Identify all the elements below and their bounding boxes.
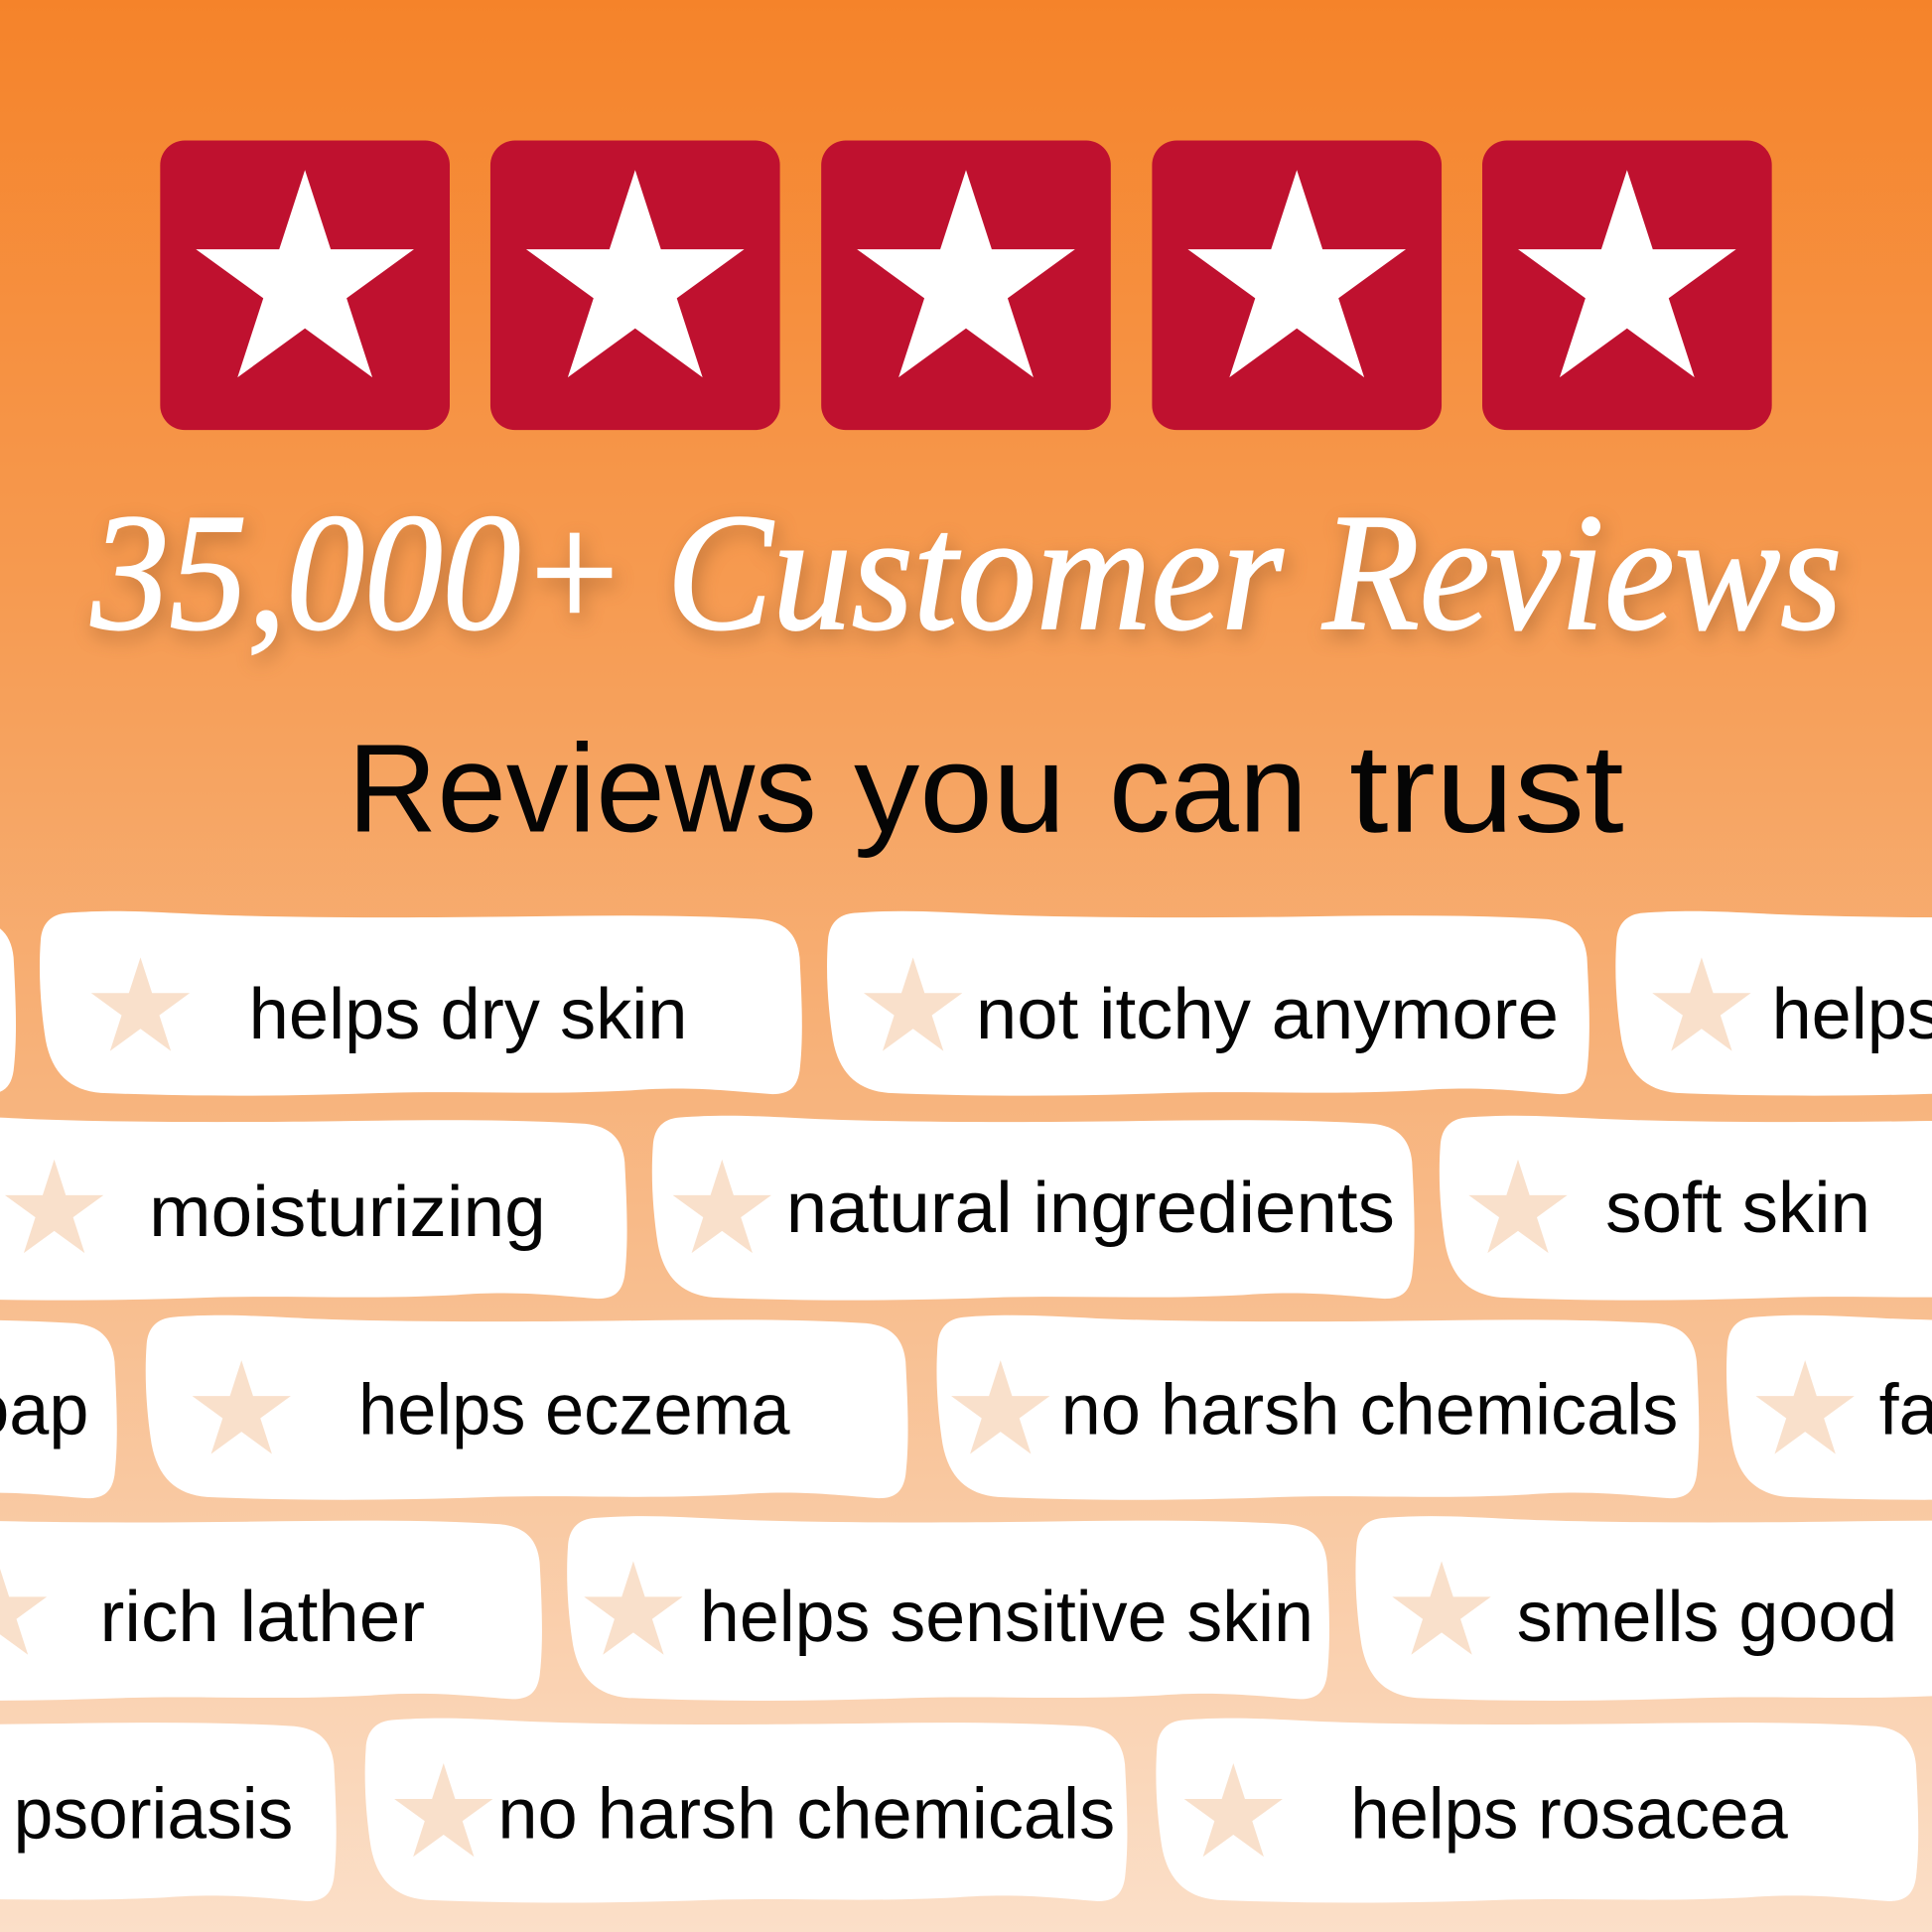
brick: helps rosacea: helps rosacea xyxy=(1350,1775,1789,1855)
brick: soap (cropped) xyxy=(0,1315,117,1500)
subtitle: reviews you can trust xyxy=(347,718,1624,859)
brick: soft skin xyxy=(1440,1116,1932,1301)
subtitle: reviews you can trust: trust xyxy=(1349,718,1624,859)
title: customer reviews: Customer Reviews xyxy=(666,480,1842,665)
brick: helps dry skin: helps dry skin xyxy=(249,975,688,1054)
brick: soft skin: soft skin xyxy=(1605,1169,1870,1248)
brick: natural ingredients: natural ingredients xyxy=(786,1169,1395,1248)
brick: smells good xyxy=(1355,1516,1932,1701)
brick: psoriasis xyxy=(0,1719,337,1903)
rating tile 5 xyxy=(1482,140,1772,430)
brick: row 1 left edge xyxy=(0,911,16,1096)
brick: moisturizing: moisturizing xyxy=(149,1173,546,1252)
brick: psoriasis: psoriasis xyxy=(14,1775,293,1855)
brick: fa (cropped) xyxy=(1726,1315,1932,1500)
brick: rich lather: rich lather xyxy=(100,1578,425,1657)
rating tile 4 xyxy=(1152,140,1442,430)
subtitle: reviews you can trust: can xyxy=(1109,718,1308,859)
subtitle: reviews you can trust: you xyxy=(854,718,1066,859)
brick: no harsh chemicals (row 5) xyxy=(365,1719,1127,1903)
brick: natural ingredients xyxy=(652,1116,1415,1301)
brick: helps rosacea xyxy=(1156,1719,1918,1903)
brick: helps sensitive skin: helps sensitive skin xyxy=(700,1578,1313,1657)
brick: helps eczema: helps eczema xyxy=(358,1371,790,1450)
rating tile 1 xyxy=(160,140,450,430)
brick: no harsh chemicals (row 3) xyxy=(936,1315,1699,1500)
brick: smells good: smells good xyxy=(1517,1578,1897,1657)
rating tile 3 xyxy=(821,140,1111,430)
title: customer reviews: 35,000+ xyxy=(90,480,625,665)
title: customer reviews xyxy=(90,480,1842,665)
brick: helps sensitive skin xyxy=(567,1516,1329,1701)
review brick wall xyxy=(0,911,1932,1903)
brick: no harsh chemicals (row 3): no harsh chemicals xyxy=(1061,1371,1678,1450)
brick: rich lather xyxy=(0,1516,542,1701)
brick: not itchy anymore xyxy=(827,911,1589,1096)
brick: helps dry skin xyxy=(40,911,802,1096)
subtitle: reviews you can trust: Reviews xyxy=(347,718,817,859)
brick: no harsh chemicals (row 5): no harsh chemicals xyxy=(497,1775,1115,1855)
brick: helps (cropped) xyxy=(1615,911,1932,1096)
brick: helps eczema xyxy=(146,1315,908,1500)
brick: moisturizing xyxy=(0,1116,627,1301)
rating tile 2 xyxy=(490,140,780,430)
five star rating row xyxy=(160,140,1772,430)
brick: not itchy anymore: not itchy anymore xyxy=(976,975,1559,1054)
